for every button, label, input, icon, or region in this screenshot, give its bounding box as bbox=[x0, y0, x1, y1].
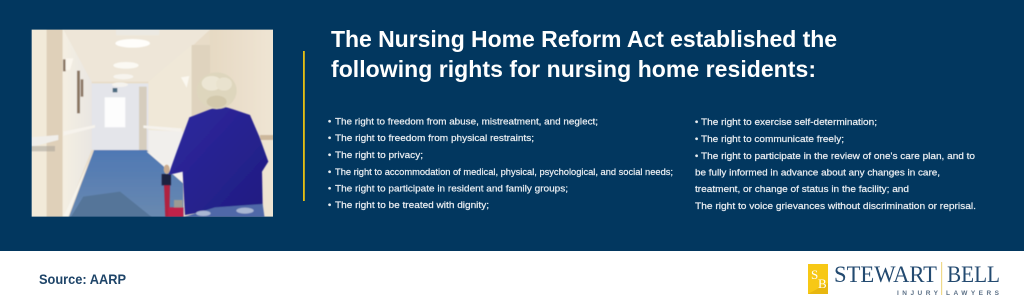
rights list: right column: • bbox=[695, 134, 698, 144]
rights list: left column: • bbox=[328, 133, 331, 143]
logo: Stewart Bell Injury Lawyers: LAWYERS bbox=[946, 290, 1000, 297]
logo mark: SB square: S bbox=[811, 267, 818, 282]
heading bbox=[331, 26, 837, 82]
rights list: left column: The right to be treated with dignity; bbox=[335, 200, 489, 210]
rights list: left column: • bbox=[328, 200, 331, 210]
logo mark: SB square bbox=[808, 264, 828, 294]
walker bbox=[162, 174, 183, 218]
rights list: left column bbox=[328, 116, 673, 210]
rights list: right column: • bbox=[695, 117, 698, 127]
rights list: right column bbox=[695, 117, 976, 211]
rights list: left column: The right to participate in resident and family groups; bbox=[335, 184, 568, 194]
rights list: right column: treatment, or change of status in the facility; and bbox=[695, 184, 909, 194]
rights list: right column: The right to exercise self-determination; bbox=[701, 117, 877, 127]
photo: elderly resident with walker in corridor bbox=[30, 28, 275, 218]
logo wordmark: STEWART bbox=[834, 262, 937, 287]
rights list: left column: • bbox=[328, 116, 331, 126]
rights list: left column: • bbox=[328, 150, 331, 160]
source label: Source: AARP bbox=[39, 271, 126, 287]
rights list: left column: The right to freedom from abuse, mistreatment, and neglect; bbox=[335, 116, 598, 126]
heading: following rights for nursing home residents: bbox=[331, 56, 816, 82]
rights list: right column: The right to voice grievances without discrimination or reprisal. bbox=[695, 201, 976, 211]
logo mark: SB square: B bbox=[818, 276, 827, 291]
rights list: left column: The right to accommodation of medical, physical, psychological, and social needs; bbox=[335, 167, 673, 177]
rights list: left column: The right to freedom from physical restraints; bbox=[335, 133, 534, 143]
logo tagline: INJURY bbox=[897, 290, 939, 297]
rights list: right column: The right to communicate freely; bbox=[701, 134, 844, 144]
logo: Stewart Bell Injury Lawyers: BELL bbox=[947, 262, 1000, 287]
logo: Stewart Bell Injury Lawyers bbox=[808, 262, 1000, 297]
heading: The Nursing Home Reform Act established the bbox=[331, 26, 837, 52]
rights list: right column: The right to participate in the review of one's care plan, and to bbox=[701, 151, 975, 161]
rights list: right column: • bbox=[695, 151, 698, 161]
rights list: left column: The right to privacy; bbox=[335, 150, 423, 160]
rights list: right column: be fully informed in advance about any changes in care, bbox=[695, 168, 940, 178]
rights list: left column: • bbox=[328, 167, 331, 177]
figure: woman in blue cardigan bbox=[164, 72, 268, 218]
yellow divider line bbox=[303, 51, 305, 201]
rights list: left column: • bbox=[328, 184, 331, 194]
